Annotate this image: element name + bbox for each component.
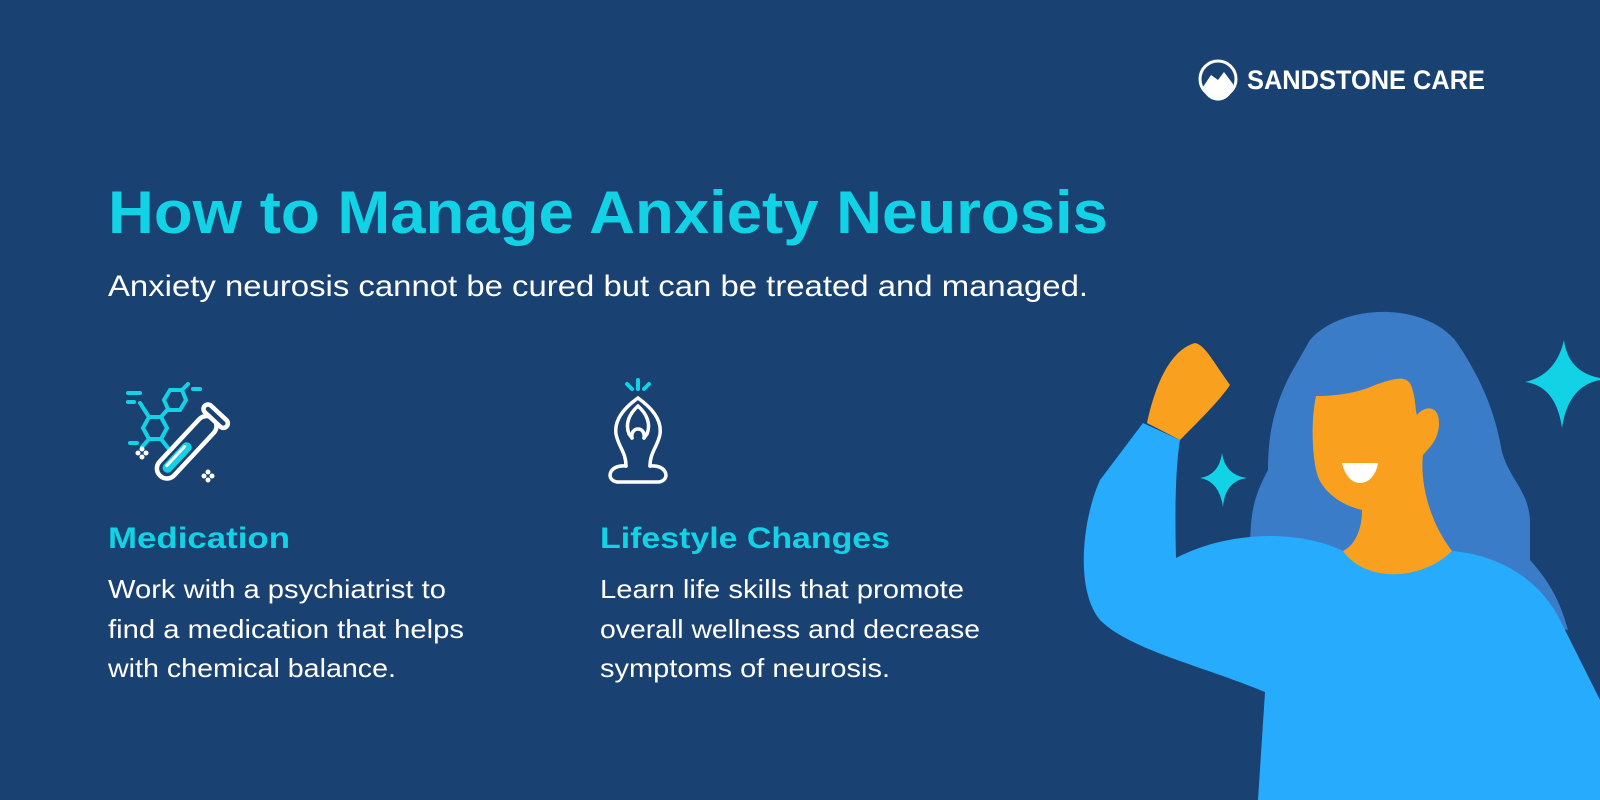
title: How to Manage Anxiety Neurosis	[108, 179, 1108, 246]
icon: meditation	[610, 380, 666, 482]
logo: SANDSTONE CARE	[1247, 65, 1485, 95]
text: lifestyle description: Learn life skills that promote	[600, 574, 964, 604]
text: lifestyle description	[600, 574, 980, 683]
text: medication description	[107, 574, 464, 683]
icon: small sparkle	[1200, 453, 1247, 507]
logo	[1200, 61, 1485, 101]
heading: Medication: Medication	[108, 522, 290, 555]
icon: medication test tube	[128, 384, 230, 486]
text: medication description: with chemical balance.	[107, 653, 396, 683]
text: lifestyle description: symptoms of neurosis.	[600, 653, 890, 683]
subtitle: Anxiety neurosis cannot be cured but can be treated and managed.	[108, 270, 1088, 303]
text: medication description: find a medication that helps	[108, 614, 464, 644]
illustration: woman	[1084, 312, 1600, 800]
heading: Lifestyle Changes: Lifestyle Changes	[600, 522, 890, 555]
icon: large sparkle	[1525, 340, 1600, 428]
text: lifestyle description: overall wellness and decrease	[600, 614, 980, 644]
text: medication description: Work with a psychiatrist to	[108, 574, 446, 604]
